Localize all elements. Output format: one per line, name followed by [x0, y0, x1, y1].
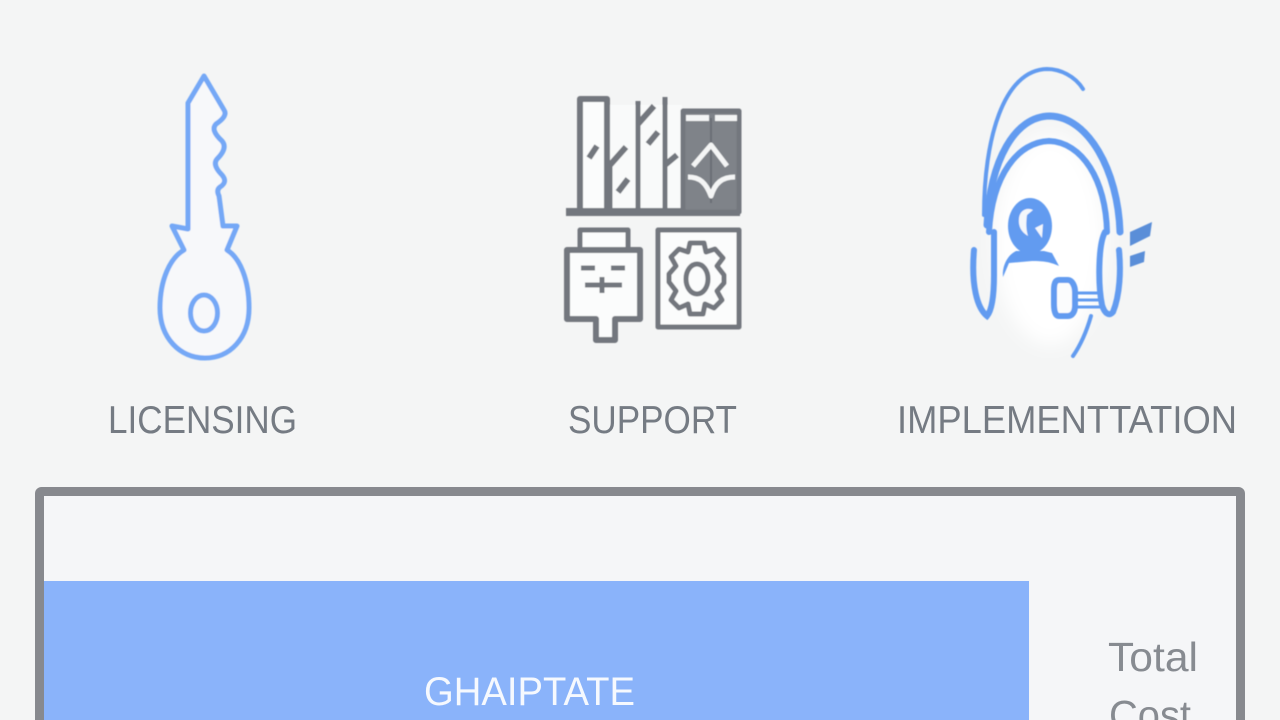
icon: headset: [973, 69, 1152, 356]
icon: key: [160, 76, 249, 358]
label: implementation: IMPLEMENTTATION: [897, 399, 1237, 442]
label: licensing: LICENSING: [108, 399, 297, 442]
panel: cost frame: [40, 492, 1240, 720]
label: total cost: Total: [1108, 634, 1198, 680]
bar: blue segment: [44, 581, 1029, 720]
printer: [567, 230, 640, 340]
label: support: SUPPORT: [568, 399, 737, 442]
shelf with books: [566, 97, 740, 212]
bar label: GHAIPTATE: [424, 670, 635, 714]
gear panel: [658, 230, 739, 327]
icon: support tools: [566, 97, 740, 340]
